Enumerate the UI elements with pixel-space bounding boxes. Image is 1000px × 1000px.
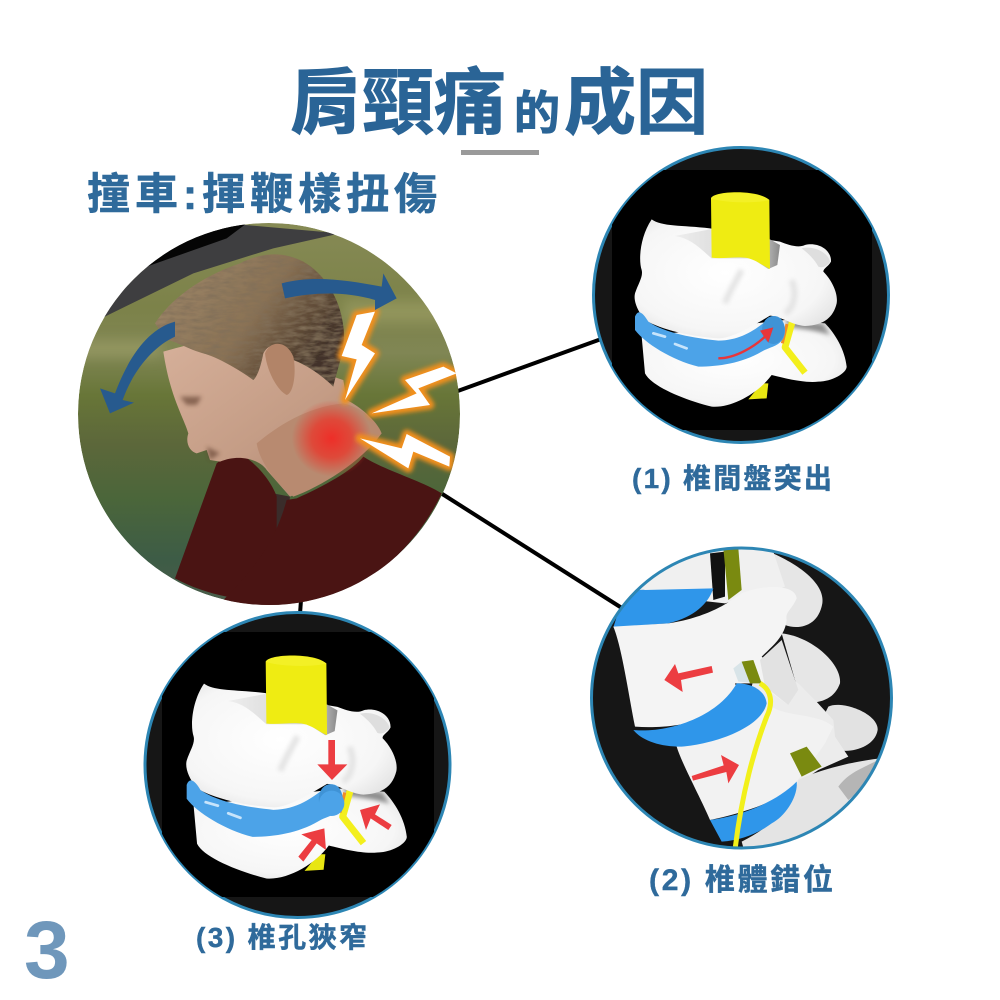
vertebra model with narrowed foramen [186, 656, 407, 879]
neck and face [163, 338, 380, 497]
label (3): (3) 椎孔狹窄 [196, 922, 367, 953]
infographic canvas [26, 65, 893, 979]
page number: 3 [24, 905, 70, 996]
car roof band [93, 223, 340, 317]
label (1): (1) 椎間盤突出 [632, 463, 832, 494]
subtitle: whiplash: 撞車:揮鞭樣扭傷 [87, 171, 437, 219]
spine model [613, 547, 880, 853]
ear [265, 344, 295, 395]
roof black edge [147, 223, 247, 267]
connector lines [300, 338, 625, 614]
motion arrows [100, 273, 397, 413]
panel: vertebral misalignment circle [592, 547, 892, 853]
red arrows [298, 740, 392, 862]
hair [155, 254, 344, 387]
rear dark neck gap [276, 494, 290, 528]
pale background stripes [73, 300, 463, 357]
panel: disc herniation circle [594, 148, 888, 442]
title: 的 [514, 87, 560, 139]
vertebra model with herniated disc [635, 192, 847, 407]
title [290, 64, 708, 144]
red arrows [664, 664, 739, 783]
title: 肩頸痛 [290, 64, 506, 144]
facial shadows [180, 397, 220, 460]
panel: whiplash photo circle [73, 223, 463, 608]
hand [257, 403, 382, 497]
panel: foraminal stenosis circle [145, 612, 450, 918]
lightning bolts [342, 312, 457, 468]
pain glow [294, 402, 368, 475]
title: 成因 [564, 64, 708, 144]
label (2): (2) 椎體錯位 [649, 863, 833, 897]
sweater [175, 456, 442, 608]
title underline [461, 150, 539, 155]
